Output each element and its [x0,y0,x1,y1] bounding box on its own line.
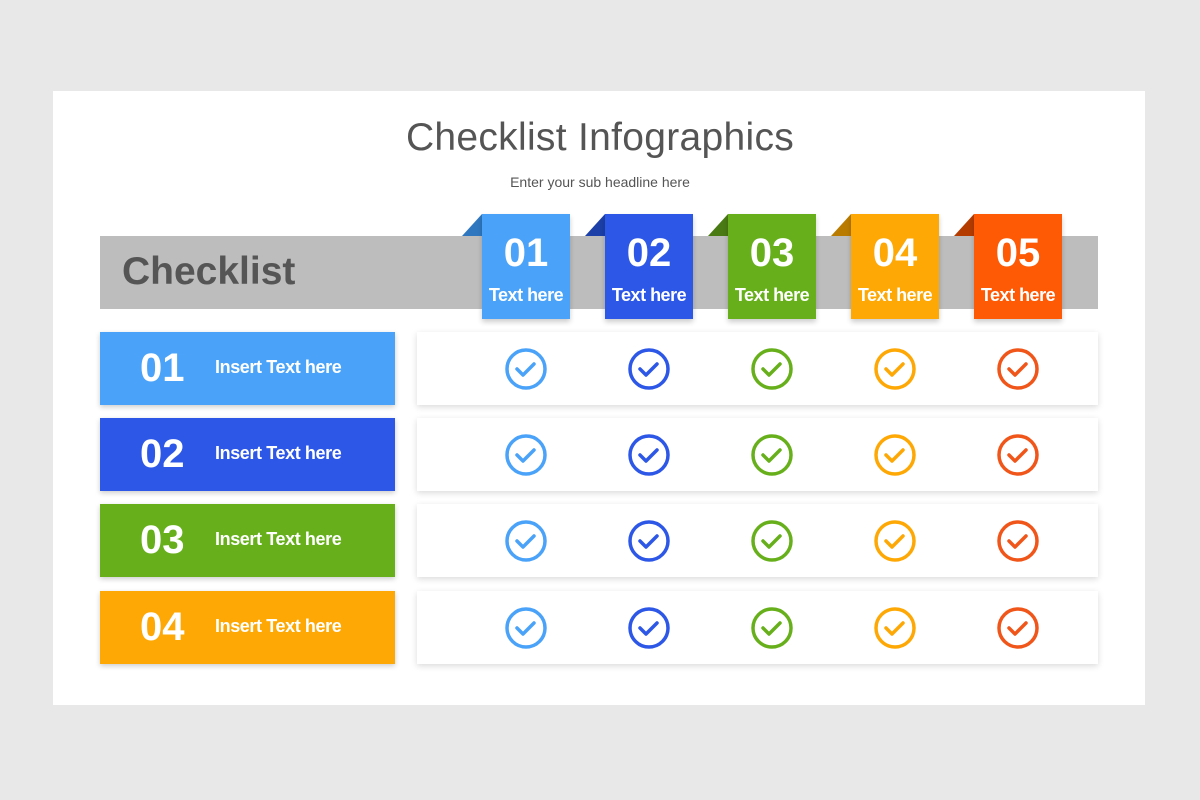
fold: 05 [954,214,974,236]
check row 2 [417,418,1098,491]
row label 01 [100,332,395,405]
check row 4 [417,591,1098,664]
row label 02 [100,418,395,491]
row label 01: Insert Text here [215,357,341,377]
row label 01: 01 [140,346,184,390]
tab 01: Text here [489,285,563,305]
tab 05: Text here [981,285,1055,305]
tab 03: Text here [735,285,809,305]
subtitle: Enter your sub headline here [510,174,690,190]
tab 02 [605,214,693,319]
row label 03: 03 [140,518,184,562]
tab 05 [974,214,1062,319]
fold: 02 [585,214,605,236]
tab 01: 01 [504,231,548,275]
row label 04: 04 [140,605,184,649]
row label 02: Insert Text here [215,443,341,463]
tab 02: 02 [627,231,671,275]
header bar: Checklist [122,250,295,293]
check row 1 [417,332,1098,405]
row label 04: Insert Text here [215,616,341,636]
header bar [100,236,1098,309]
title: Checklist Infographics [406,116,794,159]
tab 02: Text here [612,285,686,305]
tab 05: 05 [996,231,1040,275]
row label 02: 02 [140,432,184,476]
tab 01 [482,214,570,319]
card [53,91,1145,705]
tab 03: 03 [750,231,794,275]
row label 04 [100,591,395,664]
fold: 01 [462,214,482,236]
tab 04 [851,214,939,319]
tab 04: Text here [858,285,932,305]
tab 04: 04 [873,231,917,275]
fold: 03 [708,214,728,236]
row label 03: Insert Text here [215,529,341,549]
fold: 04 [831,214,851,236]
check row 3 [417,504,1098,577]
tab 03 [728,214,816,319]
row label 03 [100,504,395,577]
